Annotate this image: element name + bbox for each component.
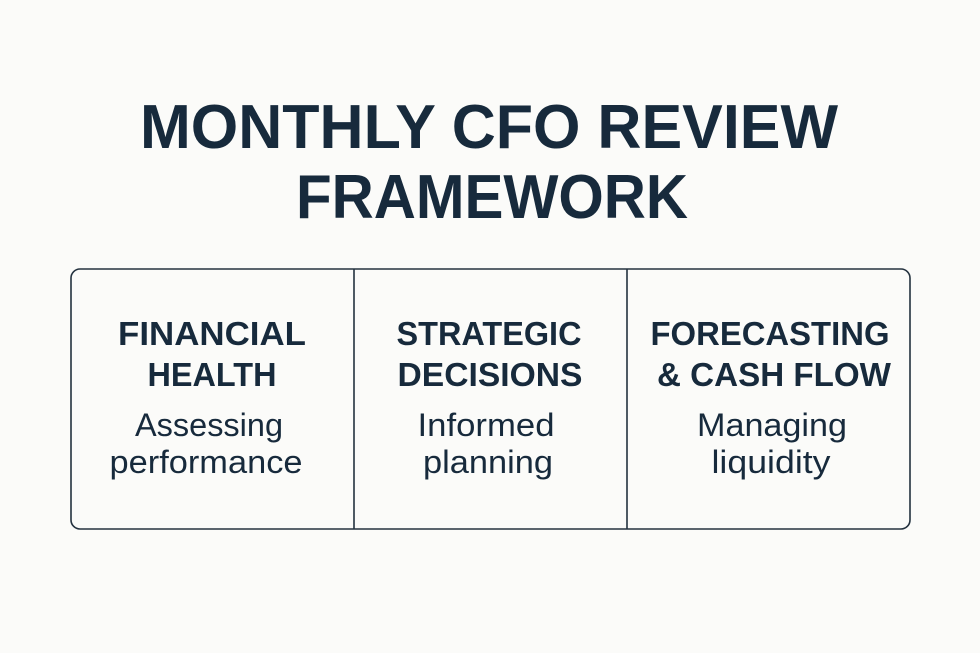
panel: forecasting & cash flow xyxy=(650,315,892,480)
heading: forecasting & cash flow xyxy=(650,315,892,393)
text: assessing performance: Assessing xyxy=(135,407,283,443)
heading: financial health: FINANCIAL xyxy=(118,315,306,352)
heading: forecasting & cash flow: & CASH FLOW xyxy=(657,356,892,393)
heading: financial health: HEALTH xyxy=(148,356,276,393)
text: informed planning xyxy=(418,407,554,480)
text: assessing performance: performance xyxy=(110,444,302,480)
heading: strategic decisions xyxy=(396,315,582,393)
heading: strategic decisions: DECISIONS xyxy=(398,356,582,393)
text: managing liquidity: Managing xyxy=(697,407,847,443)
panel: financial health xyxy=(110,315,306,480)
text: managing liquidity: liquidity xyxy=(712,444,830,480)
heading: financial health xyxy=(118,315,306,393)
panel: strategic decisions xyxy=(396,315,582,480)
text: managing liquidity xyxy=(697,407,847,480)
title: MONTHLY CFO REVIEW xyxy=(140,93,838,162)
title: FRAMEWORK xyxy=(296,163,688,232)
text: assessing performance xyxy=(110,407,302,480)
heading: strategic decisions: STRATEGIC xyxy=(396,315,582,352)
text: informed planning: Informed xyxy=(418,407,554,443)
title xyxy=(140,93,838,232)
heading: forecasting & cash flow: FORECASTING xyxy=(650,315,890,352)
text: informed planning: planning xyxy=(423,444,553,480)
panel container xyxy=(71,269,910,529)
